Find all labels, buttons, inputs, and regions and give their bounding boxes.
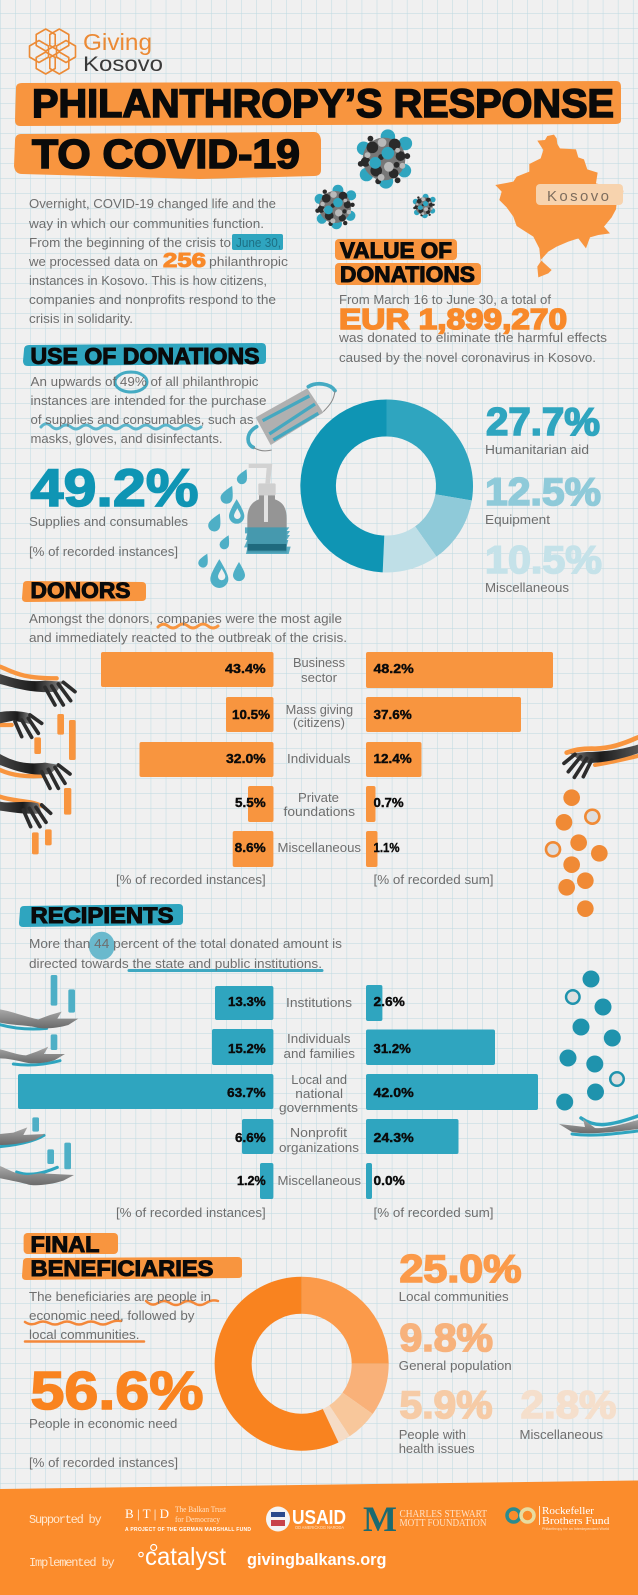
stats: final beneficiaries: People with: [399, 1427, 466, 1442]
intro text: 256: [163, 250, 206, 272]
bar chart: recipients: Nonprofit: [290, 1125, 347, 1140]
bar chart: donors: 32.0%: [226, 751, 266, 766]
panel: use of donations: An upwards of 49% of all philanthropic: [30, 374, 259, 389]
website: givingbalkans.org: [247, 1550, 386, 1569]
map label: Kosovo: [547, 188, 609, 205]
bar chart: donors: Business: [293, 655, 345, 670]
bar chart: donors: 48.2%: [374, 661, 414, 676]
panel: use of donations: Supplies and consumables: [29, 514, 188, 529]
panel: final beneficiaries: economic need, followed by: [29, 1308, 195, 1323]
bar chart: donors: foundations: [284, 804, 356, 819]
title: [14, 81, 621, 179]
icon: sanitizer bottle: [244, 464, 291, 554]
bar chart: donors: Mass giving: [286, 702, 353, 717]
intro text: way in which our communities function.: [28, 216, 264, 231]
map label: [536, 184, 623, 205]
panel: donors: and immediately reacted to the outbreak of the crisis.: [29, 630, 347, 645]
panel: use of donations: [% of recorded instances]: [29, 544, 178, 559]
panel: recipients: More than 44 percent of the total donated amount is: [29, 936, 343, 951]
icon: viruses: [315, 129, 436, 229]
bar chart: recipients: 6.6%: [235, 1130, 266, 1145]
heading: VALUE OF: [340, 238, 452, 263]
logo: USAID: OD AMERIČKOG NARODA: [295, 1524, 344, 1530]
logo: Charles Stewart Mott Foundation: CHARLES STEWART: [400, 1509, 488, 1520]
bar chart: recipients: 15.2%: [228, 1041, 266, 1056]
bar chart: donors: 10.5%: [232, 707, 270, 722]
panel: final beneficiaries: [% of recorded instances]: [29, 1455, 178, 1470]
logo: Balkan Trust: [125, 1505, 251, 1533]
stats: use of donations: 27.7%: [486, 401, 600, 444]
doodle: circle around 49%: [115, 372, 147, 392]
panel: final beneficiaries: [22, 1232, 616, 1470]
logo: Balkan Trust: for Democracy: [175, 1515, 220, 1524]
bar chart: recipients: and families: [284, 1046, 356, 1061]
bar chart: recipients: Miscellaneous: [278, 1173, 362, 1188]
intro text: companies and nonprofits respond to the: [29, 292, 276, 307]
logo: Giving Kosovo: Giving: [83, 29, 152, 55]
illustration: right hand and orange coins: [545, 737, 638, 917]
footer: [0, 1480, 638, 1595]
logo: Giving Kosovo: Kosovo: [83, 53, 163, 76]
illustration: open hands with teal strips: [0, 975, 78, 1185]
stats: use of donations: Humanitarian aid: [485, 442, 589, 457]
stats: final beneficiaries: 9.8%: [400, 1317, 493, 1360]
heading: BENEFICIARIES: [30, 1256, 214, 1281]
bar chart: recipients: 1.2%: [237, 1173, 266, 1188]
footer: Supported by: [29, 1513, 102, 1527]
bar chart: recipients: 24.3%: [374, 1130, 414, 1145]
panel: value of donations: caused by the novel coronavirus in Kosovo.: [339, 350, 596, 365]
donut chart: final beneficiaries: [215, 1277, 389, 1451]
logo: Rockefeller Brothers Fund: Philanthropy for an Interdependent World: [542, 1526, 609, 1531]
bar chart: donors: Individuals: [287, 751, 351, 766]
panel: final beneficiaries: 56.6%: [30, 1361, 204, 1421]
heading: [22, 1232, 242, 1281]
stats: use of donations: 10.5%: [485, 539, 602, 582]
stats: final beneficiaries: 25.0%: [400, 1248, 522, 1291]
logo: USAID: USAID: [292, 1507, 346, 1529]
panel: final beneficiaries: People in economic need: [29, 1416, 177, 1431]
highlight: June 30: [232, 234, 283, 250]
logo: Balkan Trust: B | T | D: [125, 1506, 169, 1521]
icon: face mask: [248, 384, 335, 451]
bar chart: donors: 0.7%: [374, 795, 404, 810]
logo: catalyst: catalyst: [145, 1543, 226, 1571]
bar chart: donors: 12.4%: [374, 751, 412, 766]
bar chart: donors: sector: [301, 670, 338, 685]
bar chart: donors: [101, 652, 553, 887]
bar chart: recipients: governments: [279, 1100, 359, 1115]
panel: use of donations: instances are intended for the purchase: [30, 393, 266, 408]
panel: value of donations: [335, 238, 608, 365]
panel: use of donations: of supplies and consumables, such as: [30, 412, 254, 427]
bar chart: donors: [% of recorded instances]: [116, 872, 266, 887]
bar chart: donors: Miscellaneous: [278, 840, 362, 855]
map of Kosovo: [495, 135, 623, 277]
logo: USAID: [266, 1506, 346, 1532]
bar chart: recipients: [% of recorded sum]: [374, 1205, 494, 1220]
intro text: philanthropic: [209, 254, 289, 269]
panel: recipients: [0, 903, 638, 1220]
doodle: wave underline: [41, 424, 201, 429]
bar chart: donors: 37.6%: [374, 707, 412, 722]
bar chart: recipients: national: [295, 1086, 343, 1101]
heading: FINAL: [30, 1232, 100, 1257]
logo: Balkan Trust: A PROJECT OF THE GERMAN MARSHALL FUND: [125, 1527, 251, 1533]
heading: DONATIONS: [340, 262, 475, 287]
logo: Charles Stewart Mott Foundation: MOTT FOUNDATION: [400, 1518, 487, 1529]
logo: Rockefeller Brothers Fund: Rockefeller: [542, 1506, 595, 1517]
intro text: crisis in solidarity.: [29, 311, 133, 326]
intro text: Overnight, COVID-19 changed life and the: [29, 196, 276, 211]
heading: [335, 238, 481, 287]
bar chart: recipients: organizations: [279, 1140, 360, 1155]
doodle: underline: [129, 969, 322, 972]
stats: final beneficiaries: 5.9%: [400, 1384, 492, 1427]
heading: DONORS: [30, 578, 130, 603]
panel: value of donations: From March 16 to June 30, a total of: [339, 292, 551, 307]
stats: use of donations: 12.5%: [485, 471, 601, 514]
logo: Rockefeller Brothers Fund: [507, 1506, 610, 1531]
bar chart: recipients: 2.6%: [374, 994, 405, 1009]
intro text: June 30,: [236, 235, 281, 250]
bar chart: donors: 1.1%: [374, 840, 400, 855]
illustration: right hand and teal coins: [556, 970, 638, 1135]
bar chart: recipients: 31.2%: [374, 1041, 411, 1056]
stats: final beneficiaries: 2.8%: [521, 1384, 616, 1427]
logo: Charles Stewart Mott Foundation: M: [363, 1499, 397, 1539]
panel: recipients: directed towards the state and public institutions.: [29, 956, 322, 971]
panel: use of donations: 49.2%: [30, 459, 198, 518]
bar chart: recipients: 63.7%: [227, 1085, 266, 1100]
intro text: From the beginning of the crisis to: [29, 235, 231, 250]
stats: final beneficiaries: Local communities: [399, 1289, 509, 1304]
bar chart: recipients: Individuals: [287, 1031, 351, 1046]
panel: final beneficiaries: The beneficiaries are people in: [29, 1289, 211, 1304]
bar chart: donors: 43.4%: [225, 661, 266, 676]
panel: value of donations: EUR 1,899,270: [339, 304, 567, 336]
stats: use of donations: Miscellaneous: [485, 580, 570, 595]
logo: Balkan Trust: The Balkan Trust: [175, 1505, 227, 1514]
bar chart: recipients: [18, 985, 538, 1220]
logo: Rockefeller Brothers Fund: Brothers Fund: [542, 1516, 610, 1527]
panel: final beneficiaries: local communities.: [29, 1327, 140, 1342]
heading: RECIPIENTS: [30, 903, 174, 928]
bar chart: donors: [% of recorded sum]: [374, 872, 494, 887]
panel: donors: Amongst the donors, companies were the most agile: [29, 611, 342, 626]
panel: use of donations: masks, gloves, and disinfectants.: [30, 431, 223, 446]
logo: Charles Stewart Mott Foundation: [363, 1499, 488, 1539]
illustration: hands with orange strips: [0, 667, 76, 854]
doodle: waves and underline: [25, 1300, 218, 1342]
icon: drops: [197, 467, 251, 588]
footer: Implemented by: [29, 1556, 115, 1570]
bar chart: recipients: Local and: [291, 1072, 347, 1087]
intro text: we processed data on: [28, 254, 158, 269]
bar chart: recipients: 13.3%: [228, 994, 266, 1009]
bar chart: donors: 8.6%: [235, 840, 266, 855]
title: PHILANTHROPY’S RESPONSE: [32, 82, 614, 126]
doodle: blob around 44: [89, 932, 115, 960]
heading: USE OF DONATIONS: [30, 343, 260, 369]
stats: use of donations: [485, 401, 602, 595]
stats: final beneficiaries: health issues: [399, 1441, 475, 1456]
doodle: wave under companies: [158, 624, 218, 628]
bar chart: recipients: 42.0%: [374, 1085, 414, 1100]
bar chart: recipients: 0.0%: [374, 1173, 405, 1188]
bar chart: donors: 5.5%: [235, 795, 266, 810]
panel: use of donations: [23, 343, 602, 595]
panel: value of donations: was donated to eliminate the harmful effects: [338, 330, 608, 345]
stats: final beneficiaries: [399, 1248, 616, 1456]
stats: use of donations: Equipment: [485, 512, 550, 527]
bar chart: donors: (citizens): [293, 715, 345, 730]
intro text: [28, 196, 289, 326]
bar chart: recipients: Institutions: [286, 995, 353, 1010]
stats: final beneficiaries: General population: [399, 1358, 512, 1373]
title: TO COVID-19: [32, 131, 300, 177]
logo: Giving Kosovo: [30, 29, 163, 76]
stats: final beneficiaries: Miscellaneous: [520, 1427, 604, 1442]
panel: donors: [0, 578, 638, 917]
bar chart: recipients: [% of recorded instances]: [116, 1205, 266, 1220]
donut chart: use of donations: [300, 400, 473, 572]
bar chart: donors: Private: [298, 790, 339, 805]
intro text: instances in Kosovo. This is how citizens,: [29, 273, 267, 288]
icon: hexagon cluster: [30, 29, 76, 74]
